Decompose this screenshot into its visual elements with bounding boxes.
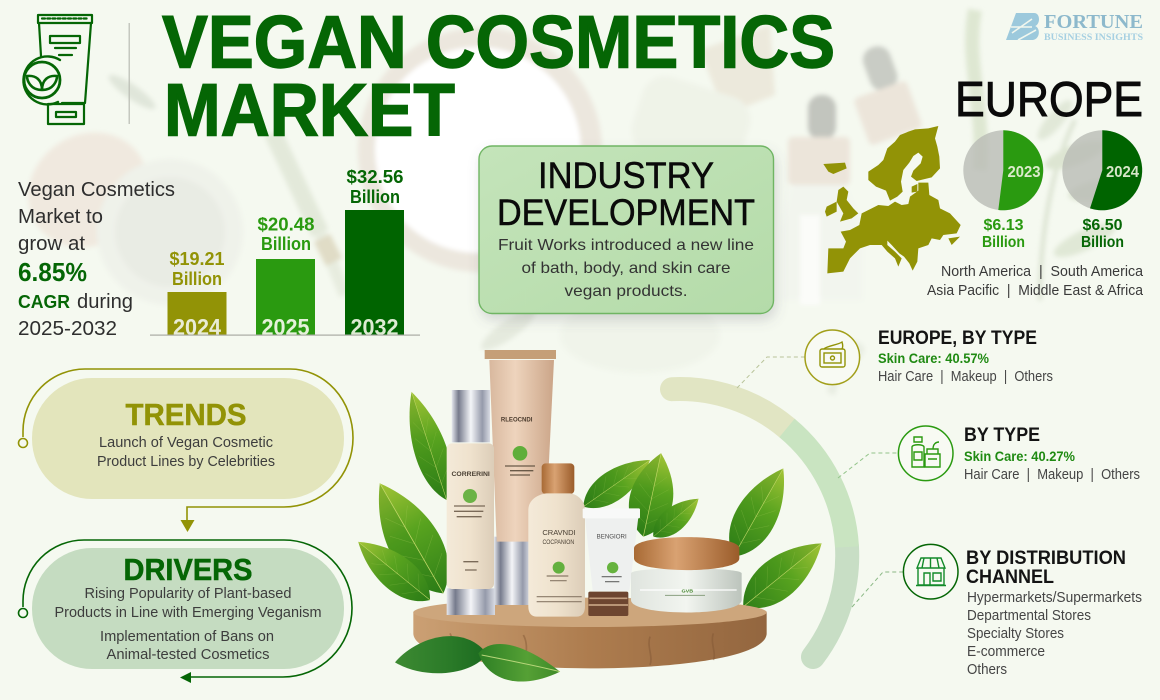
segment: by type <box>898 425 1140 483</box>
segment: Europe, by type: EUROPE, BY TYPE <box>878 328 1037 349</box>
CAGR text block: 6.85% <box>18 257 87 287</box>
icon: storefront <box>903 544 958 599</box>
segment: by distribution channel: E-commerce <box>967 644 1045 660</box>
jar <box>631 537 742 612</box>
CAGR text block: Vegan Cosmetics <box>18 178 175 201</box>
icon: tube <box>38 15 92 124</box>
panel: trends <box>18 369 353 532</box>
bar: 2032: Billion <box>350 187 400 207</box>
segment: by distribution channel: CHANNEL <box>966 567 1054 588</box>
CAGR text block: 2025-2032 <box>18 317 117 340</box>
panel: industry development <box>479 146 774 314</box>
bar: 2024: Billion <box>172 269 222 289</box>
pie: 2024 <box>1062 130 1142 251</box>
segmented arc <box>672 389 847 657</box>
panel: industry development: DEVELOPMENT <box>497 192 755 233</box>
wooden platform <box>413 598 767 668</box>
product logo icon <box>23 15 92 124</box>
bar: 2025: $20.48 <box>258 214 314 234</box>
other regions <box>927 264 1144 299</box>
panel: industry development: Fruit Works introduced a new line <box>498 237 754 254</box>
segment: by distribution channel: Others <box>967 662 1007 678</box>
bar: 2032: 2032 <box>350 314 398 340</box>
pie: 2023 <box>963 130 1043 251</box>
bar: 2024: 2024 <box>173 314 221 340</box>
pie: 2024: 2024 <box>1106 164 1139 181</box>
panel: industry development: vegan products. <box>564 283 688 300</box>
icon: cream jar <box>805 330 860 385</box>
segment: by type: BY TYPE <box>964 425 1040 446</box>
connector lines <box>737 357 903 607</box>
panel: drivers: Products in Line with Emerging Veganism <box>54 605 322 621</box>
segment: by distribution channel: Hypermarkets/Supermarkets <box>967 590 1142 606</box>
bottle: tall: CORRERINI <box>451 471 490 478</box>
tube: small: BENGIORI <box>597 535 627 541</box>
bottle: tall <box>447 390 495 615</box>
CAGR text block <box>18 178 175 340</box>
panel: drivers <box>18 540 352 683</box>
pie: 2024: $6.50 <box>1082 217 1123 234</box>
leaves behind products <box>347 387 834 622</box>
segment: Europe, by type <box>805 328 1053 385</box>
bar: 2025 <box>256 214 315 340</box>
bottle: small: CRAVNDI <box>542 530 576 537</box>
bar: 2024 <box>168 249 226 340</box>
icon: bottle and jar <box>898 426 953 481</box>
segment: Europe, by type: Skin Care: 40.57% <box>878 351 989 366</box>
region title: Europe: EUROPE <box>955 73 1143 127</box>
other regions: Asia Pacific | Middle East & Africa <box>927 283 1144 299</box>
header divider <box>129 23 130 124</box>
tube: tall <box>485 350 556 605</box>
pie: 2023: $6.13 <box>984 217 1024 234</box>
panel: drivers: Rising Popularity of Plant-based <box>84 586 292 602</box>
pie: 2024: Billion <box>1081 234 1124 251</box>
tube: tall: RLEOCNDI <box>501 416 533 423</box>
bar chart <box>168 167 404 340</box>
bar: 2025: 2025 <box>262 314 310 340</box>
panel: drivers: Implementation of Bans on <box>100 629 274 645</box>
bar: 2025: Billion <box>261 234 311 254</box>
CAGR text block: Market to <box>18 205 103 228</box>
bar: 2032: $32.56 <box>346 167 404 187</box>
icon: leaf badge <box>23 56 60 104</box>
map: Europe <box>823 126 961 273</box>
title: MARKET <box>164 68 455 152</box>
tube: small <box>583 508 640 616</box>
other regions: North America | South America <box>941 264 1144 280</box>
segment: by type: Skin Care: 40.27% <box>964 449 1075 464</box>
title: VEGAN COSMETICS <box>162 0 835 84</box>
logo: Fortune Business Insights <box>1006 11 1143 43</box>
CAGR text block: grow at <box>18 232 85 255</box>
bottle: small <box>528 463 585 617</box>
jar: GVB <box>681 588 694 594</box>
segment: by type: Hair Care | Makeup | Others <box>964 467 1140 483</box>
panel: trends: Launch of Vegan Cosmetic <box>99 435 273 451</box>
panel: industry development: INDUSTRY <box>538 155 714 196</box>
logo: Fortune Business Insights: FORTUNE <box>1044 11 1143 33</box>
pie: 2023: Billion <box>982 234 1025 251</box>
bar: 2032 <box>345 167 404 340</box>
product group illustration <box>347 350 834 682</box>
pie: 2023: 2023 <box>1008 164 1041 181</box>
panel: drivers: Animal-tested Cosmetics <box>106 647 270 663</box>
bar: 2024: $19.21 <box>170 249 224 269</box>
segment: by distribution channel: Specialty Stores <box>967 626 1064 642</box>
CAGR text block: during <box>77 290 133 313</box>
panel: drivers: DRIVERS <box>124 552 252 587</box>
faded background photo <box>6 10 1133 395</box>
segment: by distribution channel <box>903 544 1142 678</box>
CAGR text block: CAGR <box>18 291 70 312</box>
panel: industry development: of bath, body, and skin care <box>522 260 731 277</box>
panel: trends: TRENDS <box>126 397 246 432</box>
panel: trends: Product Lines by Celebrities <box>97 454 275 470</box>
leaves in front <box>395 636 560 682</box>
segment: by distribution channel: Departmental Stores <box>967 608 1091 624</box>
logo: Fortune Business Insights: BUSINESS INSIGHTS <box>1044 33 1143 43</box>
segment: by distribution channel: BY DISTRIBUTION <box>966 548 1126 569</box>
segment: Europe, by type: Hair Care | Makeup | Others <box>878 369 1053 385</box>
bottle: small: COCPANION <box>542 540 574 546</box>
title <box>162 0 835 152</box>
